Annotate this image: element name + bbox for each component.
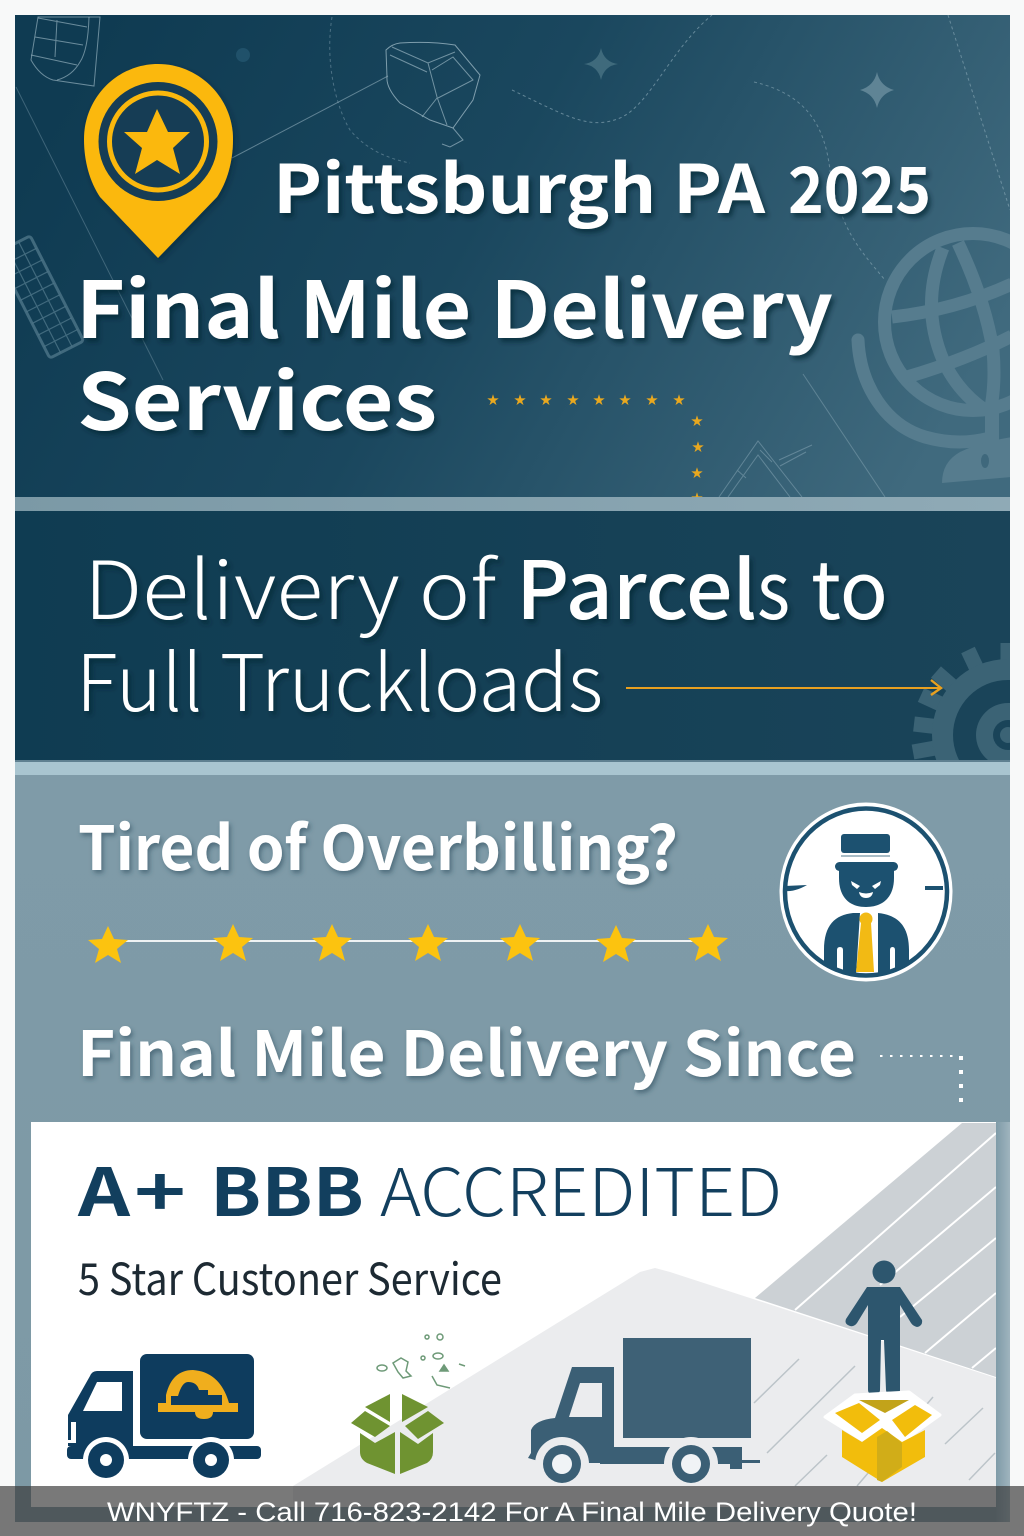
background line art and globe — [0, 15, 1024, 497]
footer caption bar — [0, 1486, 1024, 1536]
dotted star route: ★ — [487, 391, 499, 408]
heading: A+ BBB ACCREDITED: ACCREDITED — [380, 1140, 782, 1236]
heading: A+ BBB ACCREDITED: A — [77, 1140, 131, 1236]
heading: Tired of Overbilling?: Tired of Overbilling? — [78, 799, 678, 888]
dotted star route: ★ — [691, 489, 703, 506]
dotted star route: ★ — [691, 464, 703, 481]
divider band top — [15, 497, 1010, 511]
dotted star route: ★ — [646, 391, 658, 408]
panel: header — [0, 15, 1024, 497]
dotted star route: ★ — [691, 412, 703, 429]
heading: Delivery of Parcels to Full Truckloads: Full Truckloads — [76, 622, 603, 734]
icon: businessman badge — [780, 802, 952, 982]
dotted star route: ★ — [593, 391, 605, 408]
heading: A+ BBB ACCREDITED — [77, 1140, 782, 1236]
icon: gear — [912, 643, 1010, 760]
panel: accreditation card — [31, 1122, 996, 1507]
heading: A+ BBB ACCREDITED: BBB — [210, 1140, 364, 1236]
arrow — [626, 680, 941, 695]
card background shapes — [293, 1123, 996, 1507]
icon: globe — [858, 234, 1024, 483]
heading: Pittsburgh PA 2025: 2025 — [788, 140, 931, 232]
divider band lower — [15, 760, 1010, 775]
dotted star route: ★ — [540, 391, 552, 408]
icon: location pin with star — [84, 64, 233, 258]
icon: green open box with confetti — [351, 1334, 465, 1474]
heading: Final Mile Delivery Since: Final Mile Delivery Since — [77, 1004, 856, 1094]
heading: Delivery of Parcels to Full Truckloads: Parcel — [516, 527, 757, 643]
star rating line — [88, 924, 728, 963]
icon: slate box truck — [528, 1338, 760, 1491]
heading: Pittsburgh PA 2025 — [273, 136, 931, 233]
dotted connector — [880, 1056, 961, 1112]
dotted star route: ★ — [673, 391, 685, 408]
footer caption bar: WNYFTZ - Call 716-823-2142 For A Final Mile Delivery Quote! — [107, 1497, 917, 1527]
icon: person standing on yellow box — [825, 1260, 940, 1482]
panel: overbilling and accreditation — [15, 775, 1010, 1522]
heading: Delivery of Parcels to Full Truckloads: to — [811, 527, 888, 643]
dotted star route: ★ — [692, 438, 704, 455]
heading: Delivery of Parcels to Full Truckloads: s — [757, 527, 790, 643]
dotted star route: ★ — [619, 391, 631, 408]
text: 5 Star Custoner Service: 5 Star Custoner Service — [78, 1244, 502, 1308]
icon: navy delivery truck — [67, 1354, 261, 1483]
heading: Final Mile Delivery Services — [76, 249, 833, 453]
dotted star route: ★ — [514, 391, 526, 408]
dotted star route: ★ — [567, 391, 579, 408]
heading: A+ BBB ACCREDITED: + — [134, 1140, 186, 1236]
heading: Final Mile Delivery Services: Services — [77, 341, 437, 453]
heading: Delivery of Parcels to Full Truckloads — [76, 527, 888, 734]
heading: Pittsburgh PA 2025: Pittsburgh PA — [273, 136, 766, 233]
heading: Delivery of Parcels to Full Truckloads: Delivery of — [84, 527, 499, 643]
dotted star route — [488, 394, 704, 497]
heading: Final Mile Delivery Services: Final Mile Delivery — [76, 249, 833, 361]
panel: delivery range — [15, 511, 1010, 760]
